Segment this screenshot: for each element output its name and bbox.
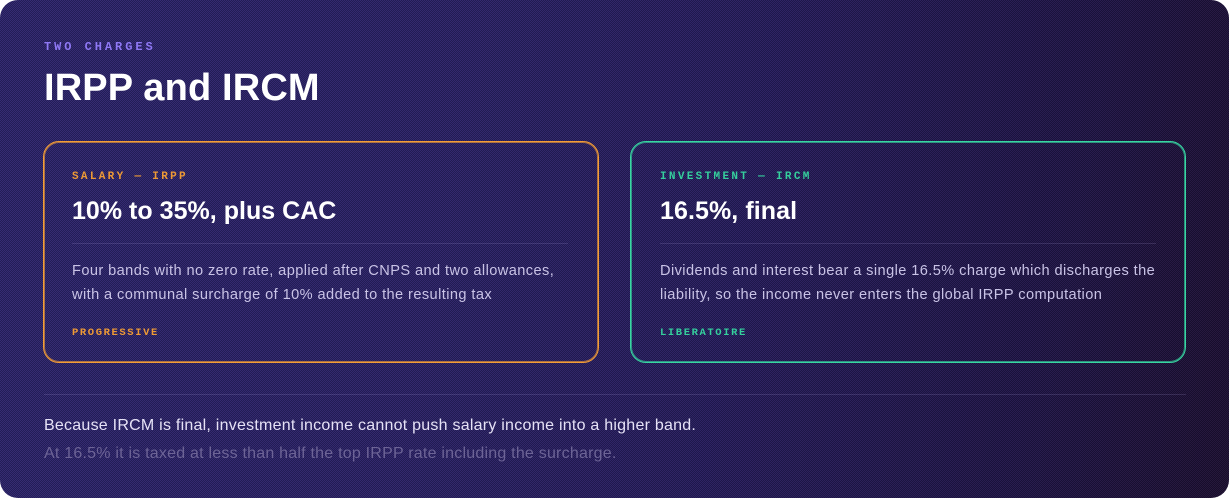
investment heading: 16.5%, final [660, 197, 797, 225]
investment description [660, 263, 1155, 303]
eyebrow: TWO CHARGES [44, 40, 156, 54]
investment description: liability, so the income never enters the global IRPP computation [660, 287, 1102, 303]
salary description: Four bands with no zero rate, applied after CNPS and two allowances, [72, 263, 554, 279]
investment description: Dividends and interest bear a single 16.5% charge which discharges the [660, 263, 1155, 279]
investment tag: LIBERATOIRE [660, 327, 747, 339]
salary tag: PROGRESSIVE [72, 327, 159, 339]
footnote secondary: At 16.5% it is taxed at less than half the top IRPP rate including the surcharge. [44, 445, 617, 462]
salary heading: 10% to 35%, plus CAC [72, 197, 336, 225]
title: IRPP and IRCM [44, 67, 320, 109]
salary description [72, 263, 554, 303]
panel: investment IRCM [630, 141, 1186, 363]
salary label: SALARY — IRPP [72, 171, 188, 183]
investment label: INVESTMENT — IRCM [660, 171, 812, 183]
footnote primary: Because IRCM is final, investment income cannot push salary income into a higher band. [44, 417, 696, 434]
salary description: with a communal surcharge of 10% added to the resulting tax [72, 287, 492, 303]
panel: salary IRPP [43, 141, 599, 363]
